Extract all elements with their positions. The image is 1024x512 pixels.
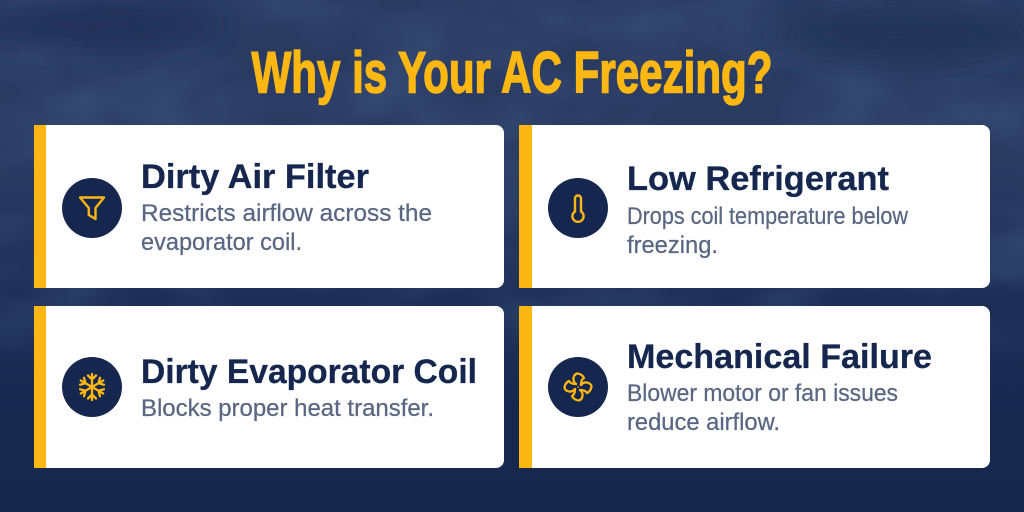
title: Why is Your AC Freezing? xyxy=(252,40,772,106)
text: mechanical failure description: Blower motor or fan issues xyxy=(627,380,898,407)
heading: dirty evaporator coil: Dirty Evaporator Coil xyxy=(141,353,477,391)
icon: funnel xyxy=(62,178,122,238)
icon: fan xyxy=(548,357,608,417)
panel: dirty air filter xyxy=(34,125,504,288)
text: dirty evaporator coil description: Blocks proper heat transfer. xyxy=(141,395,434,422)
text: dirty air filter description: Restricts airflow across the xyxy=(141,200,432,227)
icon: thermometer xyxy=(548,178,608,238)
text: dirty air filter description: evaporator coil. xyxy=(141,229,302,256)
panel: dirty evaporator coil xyxy=(34,306,504,468)
background: textured navy xyxy=(0,0,1024,354)
heading: dirty air filter: Dirty Air Filter xyxy=(141,158,369,196)
icon: snowflake xyxy=(62,357,122,417)
text: low refrigerant description: Drops coil temperature below xyxy=(627,203,909,230)
text: mechanical failure description: reduce airflow. xyxy=(627,409,780,436)
text: low refrigerant description: freezing. xyxy=(627,232,718,259)
heading: mechanical failure: Mechanical Failure xyxy=(627,338,932,376)
panel: low refrigerant xyxy=(519,125,990,288)
panel: mechanical failure xyxy=(519,306,990,468)
heading: low refrigerant: Low Refrigerant xyxy=(627,160,889,198)
